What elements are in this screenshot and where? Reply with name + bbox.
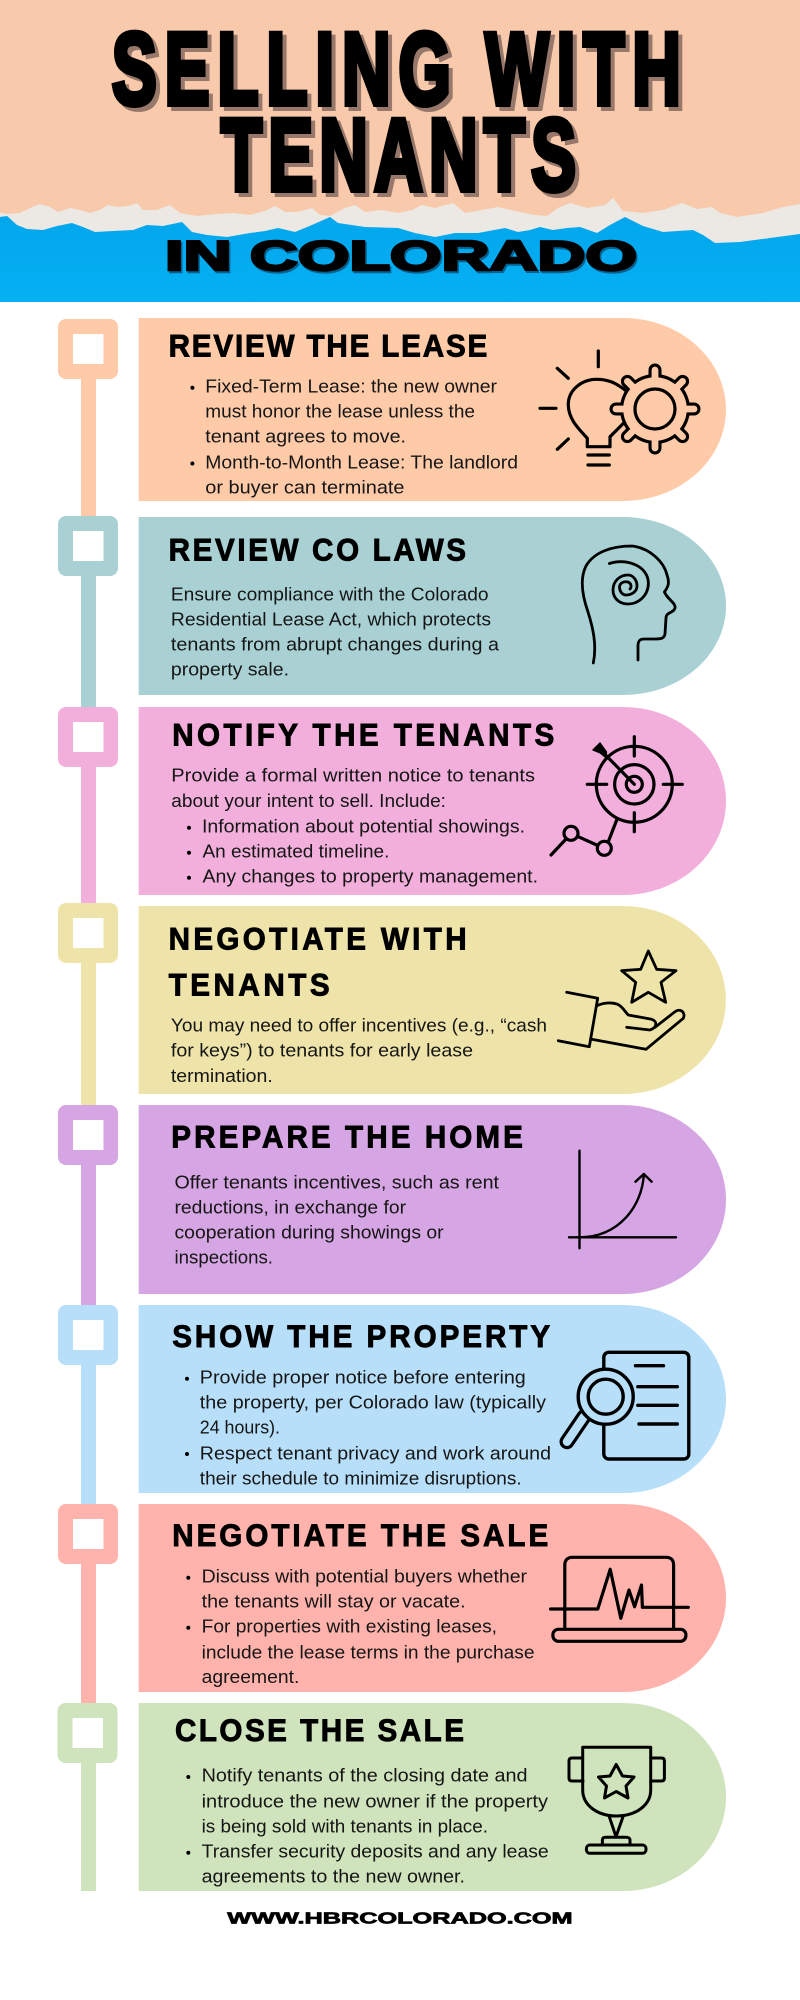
timeline connector 1 bbox=[81, 375, 96, 520]
heading: TENANTS bbox=[169, 967, 330, 1003]
body text: termination. bbox=[171, 1066, 273, 1086]
icon: laptop with heartbeat bbox=[551, 1557, 688, 1641]
heading bbox=[169, 922, 467, 1003]
heading: REVIEW CO LAWS bbox=[169, 532, 466, 568]
panel background bbox=[139, 517, 726, 695]
panel: notify the tenants bbox=[139, 707, 726, 895]
panel: review CO laws bbox=[139, 517, 726, 695]
body text: Transfer security deposits and any lease bbox=[202, 1841, 549, 1861]
body text: for keys”) to tenants for early lease bbox=[171, 1040, 473, 1060]
body text: the property, per Colorado law (typically bbox=[200, 1393, 546, 1413]
panel background bbox=[139, 1305, 726, 1493]
panel background bbox=[139, 1504, 726, 1692]
body text: the tenants will stay or vacate. bbox=[202, 1591, 466, 1611]
heading: SHOW THE PROPERTY bbox=[172, 1319, 550, 1354]
timeline node 4 bbox=[58, 903, 118, 963]
body text: property sale. bbox=[171, 660, 289, 680]
timeline connector 2 bbox=[81, 572, 96, 710]
body text bbox=[186, 1766, 549, 1886]
panel background bbox=[139, 1703, 726, 1891]
timeline connector 5 bbox=[81, 1161, 96, 1308]
body text: or buyer can terminate bbox=[205, 477, 404, 497]
title: SELLING WITH bbox=[112, 13, 681, 126]
timeline node 5 bbox=[58, 1105, 118, 1165]
body text bbox=[174, 1172, 499, 1267]
title: TENANTS bbox=[221, 99, 576, 212]
icon: head with spiral bbox=[582, 546, 675, 663]
body text: must honor the lease unless the bbox=[205, 401, 475, 421]
timeline connector 8 bbox=[81, 1759, 96, 1891]
body text: Notify tenants of the closing date and bbox=[202, 1766, 528, 1786]
timeline node 7 bbox=[58, 1504, 118, 1564]
heading: CLOSE THE SALE bbox=[175, 1713, 464, 1748]
heading: PREPARE THE HOME bbox=[171, 1119, 523, 1155]
subtitle: in Colorado: IN COLORADO bbox=[166, 234, 638, 281]
timeline connector 3 bbox=[81, 763, 96, 906]
header banner: torn paper background bbox=[0, 0, 800, 302]
panel: close the sale bbox=[139, 1703, 726, 1891]
body text: An estimated timeline. bbox=[202, 841, 389, 861]
body text: Information about potential showings. bbox=[202, 816, 525, 836]
body text: Offer tenants incentives, such as rent bbox=[174, 1172, 499, 1192]
icon: document and magnifying glass bbox=[567, 1352, 689, 1459]
panel: negotiate with tenants bbox=[139, 906, 726, 1094]
body text: 24 hours). bbox=[200, 1417, 280, 1437]
timeline node 6 bbox=[58, 1305, 118, 1365]
heading: REVIEW THE LEASE bbox=[169, 329, 487, 364]
panel background bbox=[139, 906, 726, 1094]
panel: prepare the home bbox=[139, 1105, 726, 1294]
body text: You may need to offer incentives (e.g., “cash bbox=[171, 1015, 547, 1035]
body text: agreement. bbox=[202, 1667, 299, 1687]
panel background bbox=[139, 318, 726, 501]
timeline node 3 bbox=[58, 707, 118, 767]
body text: Residential Lease Act, which protects bbox=[171, 609, 491, 629]
icon: target with arrow and chart bbox=[551, 737, 682, 855]
body text: Fixed-Term Lease: the new owner bbox=[205, 376, 497, 396]
subtitle: in Colorado bbox=[165, 232, 638, 281]
body text: Provide proper notice before entering bbox=[200, 1368, 526, 1388]
heading: NEGOTIATE WITH bbox=[169, 922, 467, 957]
body text: introduce the new owner if the property bbox=[202, 1791, 548, 1811]
body text bbox=[185, 1368, 551, 1488]
panel: review the lease bbox=[139, 318, 726, 501]
body text: is being sold with tenants in place. bbox=[202, 1816, 488, 1836]
panel background bbox=[139, 707, 726, 895]
body text bbox=[171, 766, 538, 886]
subtitle: in Colorado: IN COLORADO bbox=[165, 232, 637, 279]
body text: Respect tenant privacy and work around bbox=[200, 1443, 551, 1463]
body text: their schedule to minimize disruptions. bbox=[200, 1468, 522, 1488]
body text: tenants from abrupt changes during a bbox=[171, 634, 500, 654]
body text: For properties with existing leases, bbox=[202, 1616, 497, 1636]
timeline connector 7 bbox=[81, 1560, 96, 1706]
timeline connector 4 bbox=[81, 959, 96, 1108]
timeline node 8 bbox=[58, 1703, 118, 1763]
body text: cooperation during showings or bbox=[174, 1223, 444, 1243]
heading: NEGOTIATE THE SALE bbox=[172, 1518, 548, 1553]
timeline node 1 bbox=[58, 319, 118, 379]
timeline node 2 bbox=[58, 516, 118, 576]
title bbox=[112, 13, 685, 216]
icon: hand holding star bbox=[558, 951, 684, 1049]
body text bbox=[186, 1566, 535, 1687]
body text bbox=[171, 584, 500, 680]
body text: agreements to the new owner. bbox=[202, 1866, 465, 1886]
body text bbox=[171, 1015, 547, 1086]
panel: show the property bbox=[139, 1305, 726, 1493]
timeline connector 6 bbox=[81, 1361, 96, 1507]
icon: light bulb and gear bbox=[540, 351, 694, 465]
body text: about your intent to sell. Include: bbox=[171, 791, 446, 811]
heading: NOTIFY THE TENANTS bbox=[172, 717, 554, 753]
body text bbox=[190, 376, 518, 497]
body text: tenant agrees to move. bbox=[205, 427, 406, 447]
body text: Any changes to property management. bbox=[202, 866, 538, 886]
title: TENANTS bbox=[225, 103, 580, 216]
body text: reductions, in exchange for bbox=[174, 1197, 406, 1217]
body text: Ensure compliance with the Colorado bbox=[171, 584, 489, 604]
panel: negotiate the sale bbox=[139, 1504, 726, 1692]
panel background bbox=[139, 1105, 726, 1294]
body text: include the lease terms in the purchase bbox=[202, 1642, 534, 1662]
body text: Provide a formal written notice to tenants bbox=[171, 766, 535, 786]
icon: growth curve graph bbox=[569, 1151, 676, 1248]
footer website link: WWW.HBRCOLORADO.COM bbox=[227, 1911, 573, 1928]
body text: Month-to-Month Lease: The landlord bbox=[205, 452, 518, 472]
body text: Discuss with potential buyers whether bbox=[202, 1566, 527, 1586]
title: SELLING WITH bbox=[116, 17, 685, 130]
body text: inspections. bbox=[174, 1247, 273, 1267]
icon: trophy with star bbox=[569, 1747, 664, 1853]
